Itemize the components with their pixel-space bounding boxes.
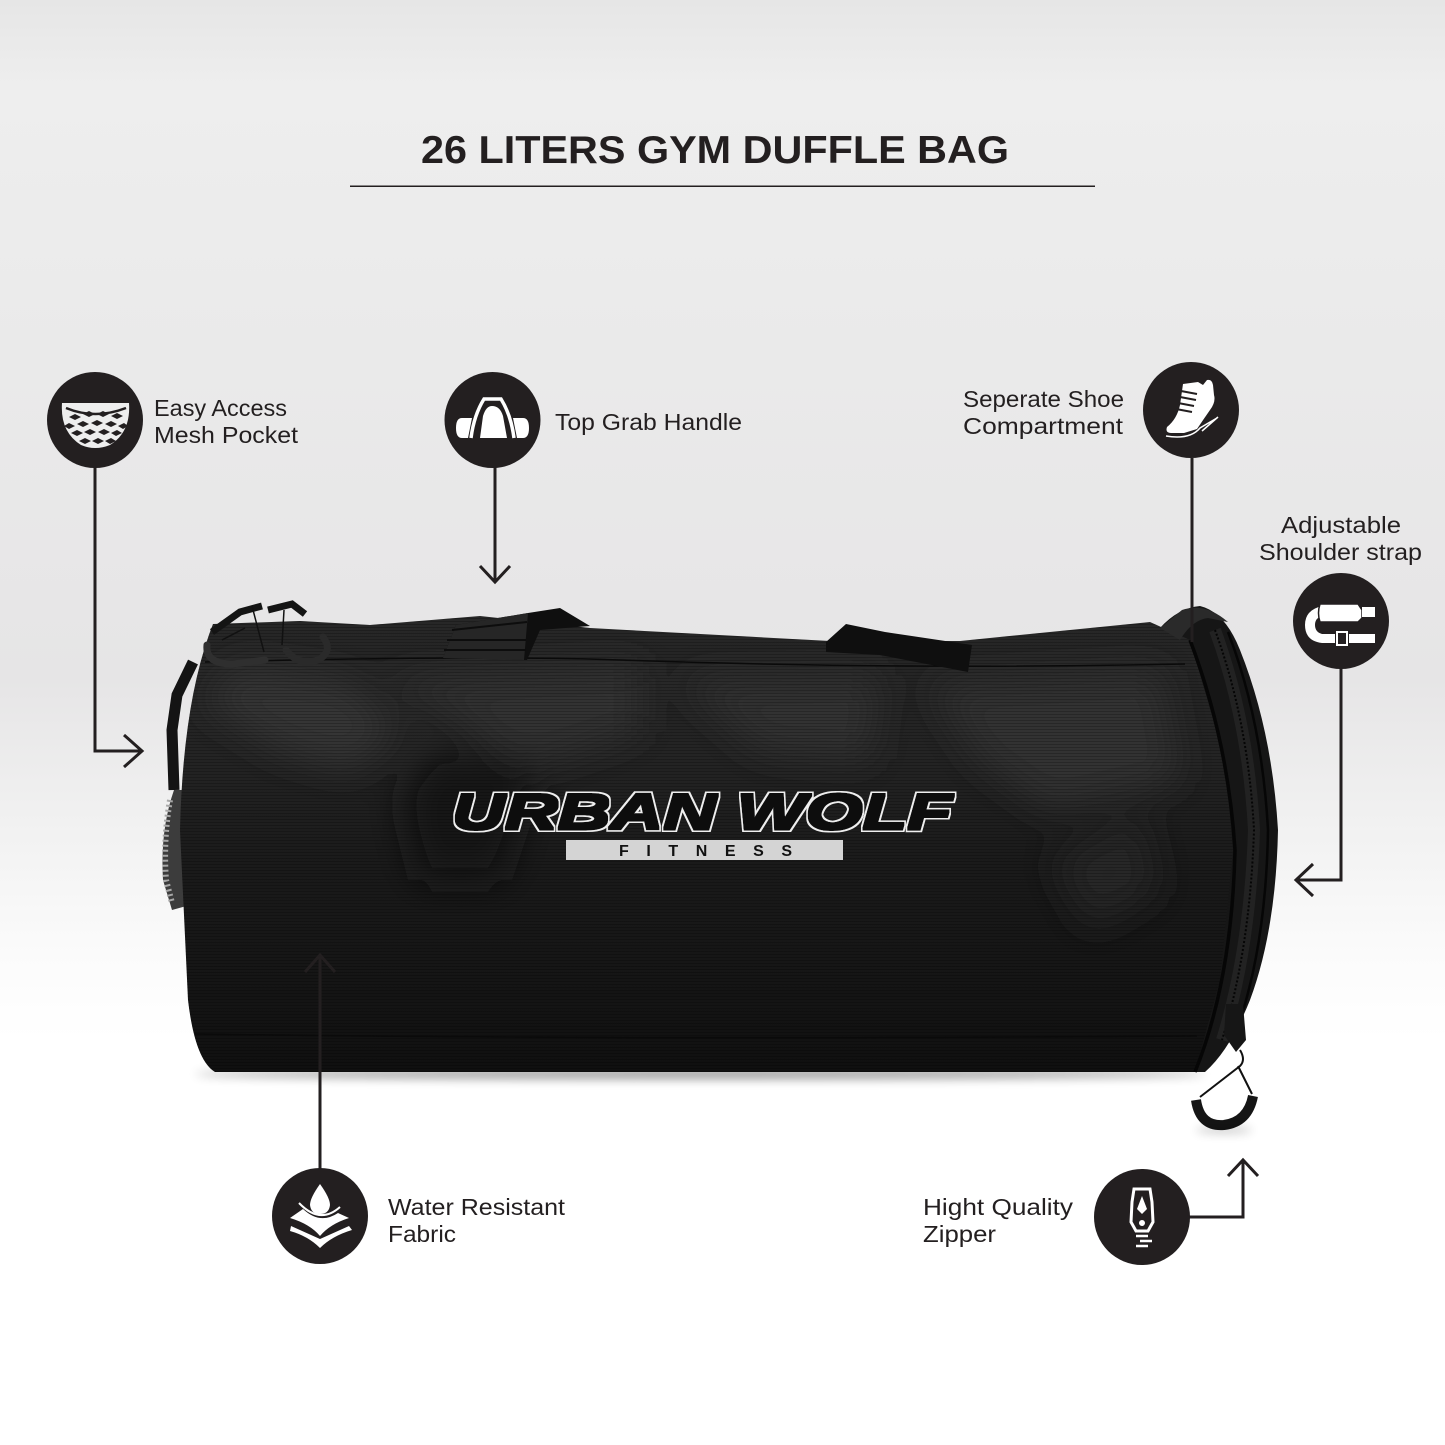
label: shoe compartment: Compartment — [963, 413, 1124, 439]
icon: duffle bag — [444, 372, 540, 468]
arrow: zipper — [1188, 1160, 1258, 1217]
fabric folds — [170, 610, 1240, 1080]
product photo: duffle bag — [162, 604, 1278, 1132]
callout: shoulder strap — [1259, 512, 1422, 896]
zipper pulls — [207, 604, 327, 664]
floor shadow — [195, 1069, 1205, 1079]
callout: zipper — [923, 1160, 1258, 1265]
icon: zipper pull — [1094, 1169, 1190, 1265]
label: zipper — [923, 1194, 1074, 1247]
end cap zipper band — [1215, 630, 1254, 1040]
label: mesh pocket: Easy Access — [154, 395, 287, 421]
icon: running shoe — [1143, 362, 1239, 458]
bottom zipper pull — [1196, 1004, 1253, 1132]
label: shoulder strap: Shoulder strap — [1259, 539, 1422, 565]
label: mesh pocket — [154, 395, 299, 448]
logo: Urban Wolf Fitness — [452, 784, 954, 860]
icon: water drop on fabric — [272, 1168, 368, 1264]
arrow: water resistant — [305, 955, 335, 1170]
fabric weave — [170, 610, 1240, 1080]
end cap piping — [1190, 640, 1235, 1072]
label: shoe compartment — [963, 386, 1124, 439]
arrow: mesh pocket — [95, 466, 142, 767]
callout: water resistant — [272, 955, 566, 1264]
label: water resistant — [388, 1194, 566, 1247]
mesh side pocket — [162, 790, 190, 910]
callout: top handle — [444, 372, 742, 582]
handle right — [826, 624, 972, 672]
label: mesh pocket: Mesh Pocket — [154, 422, 299, 448]
label: water resistant: Fabric — [388, 1221, 456, 1247]
arrow: shoulder strap — [1296, 667, 1341, 896]
icon: belt strap — [1293, 573, 1389, 669]
callout: mesh pocket — [47, 372, 299, 767]
bag body — [180, 616, 1233, 1072]
label: shoulder strap — [1259, 512, 1422, 565]
icon: mesh net — [47, 372, 143, 468]
logo: Urban Wolf Fitness: URBAN WOLF — [452, 784, 954, 840]
label: zipper: Hight Quality — [923, 1194, 1074, 1220]
handle left — [443, 608, 590, 660]
label: top handle: Top Grab Handle — [555, 409, 742, 435]
arrow: shoe compartment — [1190, 458, 1194, 642]
title: 26 LITERS GYM DUFFLE BAG — [421, 129, 1009, 172]
label: shoe compartment: Seperate Shoe — [963, 386, 1124, 412]
label: zipper: Zipper — [923, 1221, 996, 1247]
callout: shoe compartment — [963, 362, 1239, 642]
side strap loop — [172, 662, 193, 790]
top and bottom seams — [195, 658, 1197, 1038]
right end cap — [1160, 606, 1278, 1072]
end cap tab — [1160, 608, 1228, 640]
arrow: top handle — [480, 466, 510, 582]
logo: Urban Wolf Fitness: FITNESS — [619, 843, 792, 860]
label: water resistant: Water Resistant — [388, 1194, 566, 1220]
label: shoulder strap: Adjustable — [1281, 512, 1401, 538]
